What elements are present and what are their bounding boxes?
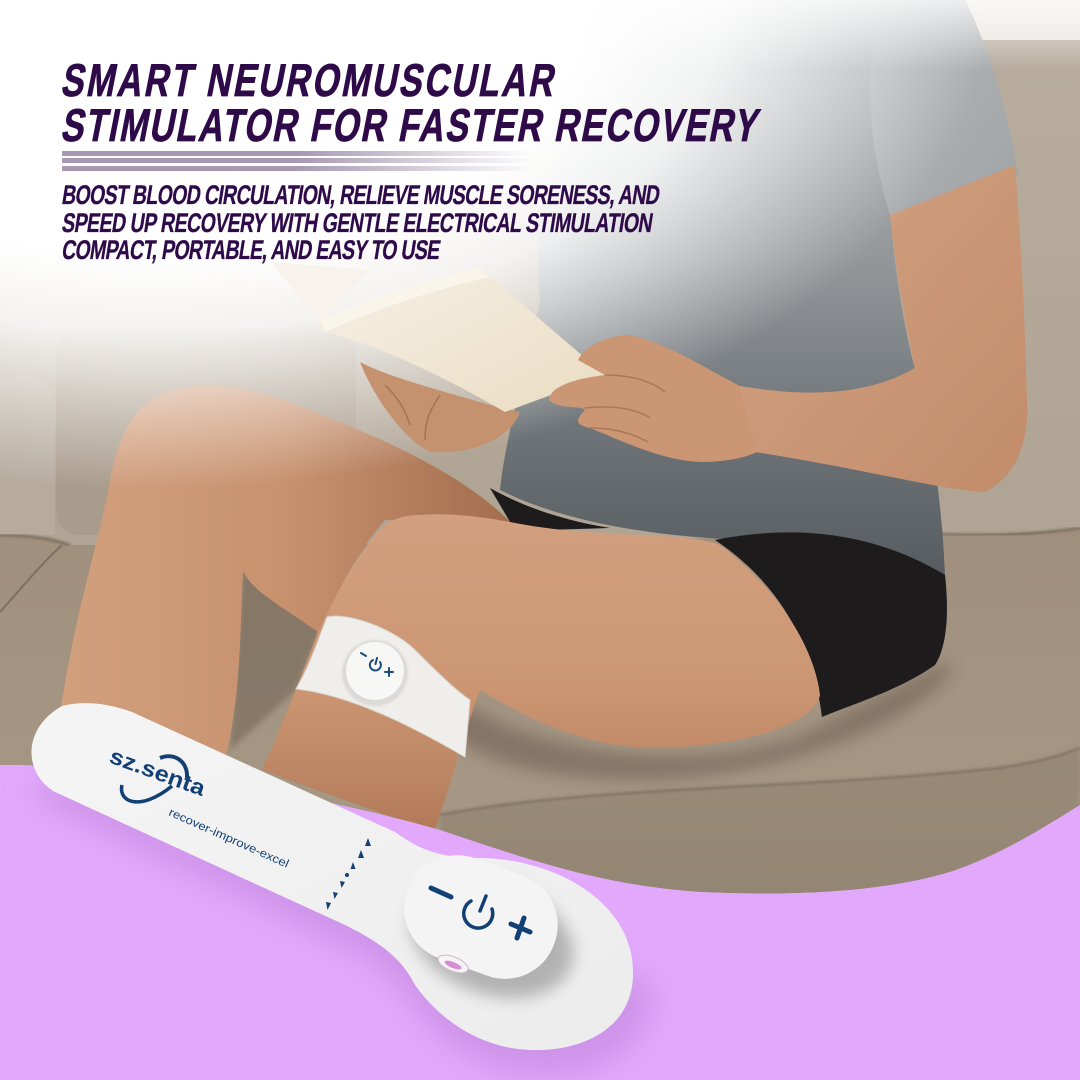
title: STIMULATOR FOR FASTER RECOVERY: [58, 99, 764, 151]
knee strap: [296, 616, 470, 757]
shadow between legs: [230, 570, 320, 750]
logo: sz.senta: [106, 743, 210, 801]
device shadow on purple: [30, 770, 652, 1075]
title: SMART NEUROMUSCULAR: [58, 54, 560, 106]
product: stimulator device: [31, 703, 633, 1050]
shirt: [500, 24, 982, 575]
purple base panel: [0, 765, 1080, 1080]
icon: minus: [431, 888, 451, 897]
subtitle text: SPEED UP RECOVERY WITH GENTLE ELECTRICAL STIMULATION: [60, 209, 655, 239]
near leg: [262, 514, 820, 830]
shorts: [490, 488, 947, 717]
subtitle text: BOOST BLOOD CIRCULATION, RELIEVE MUSCLE SORENESS, AND: [60, 181, 662, 211]
icon: plus: [511, 918, 530, 938]
decorative triple bars: [62, 151, 532, 171]
module shadow: [394, 857, 590, 1019]
subtitle text: COMPACT, PORTABLE, AND EASY TO USE: [60, 236, 443, 266]
book: [270, 262, 605, 412]
icon: strap controls: [361, 653, 393, 676]
control module: [390, 841, 572, 993]
tagline: recover-improve-excel: [167, 807, 290, 871]
shirt sleeve: [872, 27, 982, 215]
upper arm and forearm: [735, 165, 1027, 492]
icon: arrows: [326, 838, 371, 910]
far leg: [60, 386, 512, 760]
left hand: [360, 362, 520, 452]
title: [58, 54, 764, 151]
right hand: [549, 335, 757, 462]
white photo fade: [0, 0, 1080, 478]
icon: power: [464, 896, 493, 928]
shadow under legs: [430, 660, 950, 780]
subtitle text: [60, 181, 662, 266]
charging port: [436, 952, 470, 976]
